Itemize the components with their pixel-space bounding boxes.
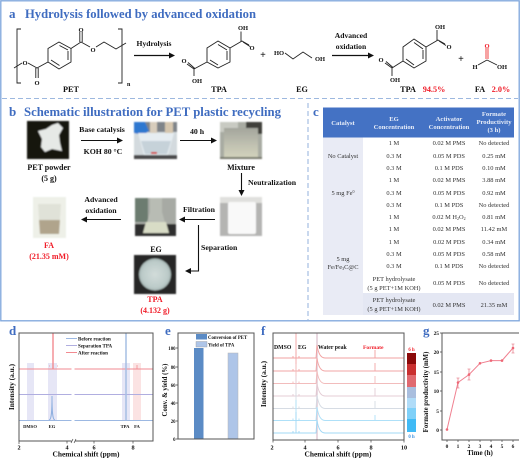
arrow: neutralization	[238, 173, 297, 196]
structure: EG: HO	[274, 50, 284, 57]
table body: 11.42 mM	[481, 226, 508, 233]
water peak band	[316, 333, 318, 440]
arrow: hydrolysis: Hydrolysis	[137, 39, 171, 48]
axis labels: 6	[336, 444, 340, 452]
panel a: hydrolysis and oxidation scheme	[9, 6, 510, 94]
arrow: 40 h: 40 h	[190, 127, 205, 136]
structure: PET: n	[127, 82, 131, 88]
legend	[196, 334, 248, 348]
table body: 0.3 M	[386, 165, 402, 172]
text: TPA label	[140, 295, 170, 315]
axis labels: 6	[92, 444, 96, 452]
arrow: hydrolysis	[134, 39, 175, 58]
arrow: filtration: Filtration	[183, 205, 216, 214]
table header: Productivity	[476, 119, 512, 126]
structure: FA: 2.0%	[492, 85, 510, 94]
table header: Formate	[482, 111, 506, 118]
table header	[323, 108, 514, 138]
panel f: time-resolved NMR	[259, 323, 416, 458]
heading a: a	[9, 6, 16, 21]
axis labels: 4	[65, 444, 69, 452]
structure: PET	[14, 27, 131, 94]
legend: Yield of TPA	[208, 344, 235, 348]
text: TPA label: (4.132 g)	[140, 306, 170, 315]
structure: PET: O	[22, 60, 28, 67]
axis labels: 100	[168, 347, 176, 352]
text: FA label	[29, 241, 69, 261]
peak labels: TPA	[121, 424, 130, 429]
table body: 0.3 M	[386, 251, 402, 258]
axes	[19, 333, 153, 441]
axis labels: Intensity (a.u.)	[7, 363, 16, 410]
axis labels: 5	[501, 444, 504, 450]
table body: 1 M	[389, 214, 400, 221]
axis labels: 3	[479, 444, 482, 450]
axis break	[19, 438, 133, 444]
axis labels: 8	[131, 444, 135, 452]
arrow: advanced oxidation	[81, 195, 121, 222]
structure: FA	[472, 43, 510, 94]
axis labels: Intensity (a.u.)	[259, 360, 268, 407]
text: PET powder label	[27, 163, 71, 183]
axis labels	[162, 347, 176, 443]
panel e: bar chart	[162, 323, 254, 443]
table body: 1 M	[389, 140, 400, 147]
axis labels: 80	[171, 366, 176, 371]
text: PET powder label: PET powder	[27, 163, 71, 172]
table body: No detected	[479, 280, 510, 287]
axis labels: Conv. & yield (%)	[162, 364, 169, 416]
arrow: base catalysis: Base catalysis	[79, 125, 125, 134]
table body: 3	[342, 266, 344, 271]
axis labels: 10	[434, 389, 439, 395]
table body: 5 mg Fe	[332, 190, 352, 197]
photo: FA beaker	[33, 197, 66, 238]
structure: PET: O	[90, 47, 96, 54]
structure: EG: OH	[315, 56, 325, 63]
structure: FA: FA	[475, 85, 485, 94]
axis labels: 2	[468, 444, 471, 450]
table body: 0.02 M PMS	[433, 140, 466, 147]
axes	[176, 333, 254, 439]
table body: 0.1 M PDS	[435, 165, 464, 172]
photo: EG flask	[135, 198, 176, 236]
photo: white precipitate	[220, 197, 262, 236]
table body: 1 M	[389, 239, 400, 246]
table body: PET hydrolysate	[373, 297, 415, 304]
axis labels: 20	[434, 350, 439, 356]
table body: 0.34 mM	[482, 239, 506, 246]
table body: 0.3 M	[386, 263, 402, 270]
structure: FA: OH	[497, 64, 507, 71]
structure: TPA product	[378, 24, 452, 94]
table body: 0.05 M PDS	[433, 190, 465, 197]
label d: d	[9, 323, 17, 338]
arrow: advanced oxidation: Advanced	[84, 195, 118, 204]
structure: PET: O	[34, 80, 40, 87]
peak labels: FA	[134, 424, 141, 429]
table body: 0.05 M PDS	[433, 251, 465, 258]
table body: 3.88 mM	[482, 177, 506, 184]
axis labels: 2	[17, 444, 21, 452]
table body: 0.1 M PDS	[435, 263, 464, 270]
text: mixture label: Mixture	[227, 163, 255, 172]
text: FA label: (21.35 mM)	[29, 252, 69, 261]
axis labels: 10	[401, 444, 407, 452]
arrow: advanced oxidation: Advanced	[335, 31, 368, 40]
axis labels: 4	[303, 444, 307, 452]
structure: TPA product: TPA	[400, 85, 416, 94]
table body: 1 M	[389, 177, 400, 184]
table body: 1 M	[389, 226, 400, 233]
photo: mixture	[220, 122, 262, 159]
structure: TPA	[181, 25, 255, 94]
axis labels: Formate productivity (mM)	[423, 352, 430, 432]
axis labels: 60	[171, 384, 176, 389]
axis labels	[7, 363, 135, 458]
panel b: PET recycling schematic	[9, 104, 297, 315]
highlighted bands	[27, 363, 141, 420]
table body: 0.3 M	[386, 202, 402, 209]
heading b: Schematic illustration for PET plastic recycling	[24, 105, 282, 119]
data series	[446, 344, 514, 431]
peak labels: DMSO	[23, 424, 37, 429]
photo: PET powder	[27, 121, 69, 159]
table body: O	[459, 214, 464, 221]
colour scale: 6 h	[408, 348, 415, 353]
axis labels: 8	[369, 444, 373, 452]
table body: 21.35 mM	[481, 302, 508, 309]
legend: Conversion of PET	[208, 336, 248, 341]
axis labels: 0	[446, 444, 449, 450]
table body: 0.02 M H	[432, 214, 457, 221]
table body: 0.02 M PMS	[433, 226, 466, 233]
table body: 0.02 M PMS	[433, 177, 466, 184]
label e: e	[165, 323, 171, 338]
table header: (3 h)	[487, 127, 501, 134]
table body: PET hydrolysate	[373, 276, 415, 283]
text: EG label: EG	[150, 245, 162, 254]
colour scale	[407, 348, 416, 440]
label f: f	[261, 323, 266, 338]
table body: 0.3 M	[386, 153, 402, 160]
colour scale: 0 h	[408, 435, 415, 440]
axis labels: 20	[171, 420, 176, 425]
legend	[66, 338, 113, 356]
arrow: advanced oxidation	[332, 31, 374, 58]
axis labels: 4	[490, 444, 493, 450]
table body: (5 g PET+1M KOH)	[367, 306, 421, 313]
table body: 0.58 mM	[482, 251, 506, 258]
structure: FA: H	[472, 64, 478, 71]
table body: 5 mg	[337, 256, 350, 263]
legend: After reaction	[78, 352, 108, 356]
text: PET powder label: (5 g)	[41, 174, 57, 183]
spectra	[273, 333, 404, 433]
structure: EG	[274, 50, 325, 94]
peak labels: EG	[49, 424, 56, 429]
table header: Concentration	[429, 124, 470, 131]
axis labels: 6	[512, 444, 515, 450]
peak labels	[23, 424, 141, 429]
panel d: NMR spectra	[7, 323, 153, 458]
heading a: Hydrolysis followed by advanced oxidation	[25, 7, 256, 21]
table body: No Catalyst	[328, 153, 358, 160]
arrow: separation	[185, 225, 238, 274]
table body: 2	[464, 216, 466, 221]
axis labels: 2	[270, 444, 274, 452]
table body: 0.81 mM	[482, 214, 506, 221]
table body: 0.25 mM	[482, 153, 506, 160]
arrow: base catalysis: KOH 80 °C	[84, 147, 123, 156]
structure: TPA: TPA	[211, 85, 227, 94]
table body: 0	[352, 189, 354, 194]
structure: TPA: OH	[238, 25, 248, 32]
arrow: advanced oxidation: oxidation	[85, 206, 117, 215]
table body: No detected	[479, 263, 510, 270]
structure: TPA: OH	[192, 78, 202, 85]
axis labels: 25	[434, 331, 439, 337]
panel c: catalyst table	[313, 104, 514, 315]
text: FA label: FA	[44, 241, 54, 250]
table body: 0.05 M PDS	[433, 153, 465, 160]
panel g: formate line chart	[423, 323, 519, 457]
table body: 0.92 mM	[482, 190, 506, 197]
heading c: c	[313, 104, 319, 119]
structure: TPA product: O	[446, 44, 452, 51]
arrow: filtration	[179, 205, 216, 222]
table body: Fe/Fe	[328, 264, 342, 271]
structure: PET: PET	[63, 85, 79, 94]
structure: TPA product: O	[378, 57, 384, 64]
axis labels: 0	[173, 438, 176, 443]
axis labels: 15	[434, 370, 439, 376]
table body: 0.1 M PDS	[435, 202, 464, 209]
peak labels	[274, 345, 384, 351]
table header: Catalyst	[331, 120, 356, 127]
photo: TPA pellet	[134, 255, 176, 294]
peak labels: Water peak	[318, 345, 347, 351]
arrow: neutralization: Neutralization	[248, 178, 297, 187]
axis labels: 0	[436, 428, 439, 434]
arrow: separation: Separation	[201, 243, 238, 252]
table body: 0.02 M PMS	[433, 302, 466, 309]
axis labels: 1	[457, 444, 460, 450]
table header: EG	[389, 116, 399, 123]
axes	[440, 333, 519, 442]
structure: TPA product: 94.5%	[423, 85, 445, 94]
axis labels: 40	[171, 402, 176, 407]
structure: EG: EG	[296, 85, 309, 94]
table body: 0.02 M PDS	[433, 239, 465, 246]
label g: g	[423, 323, 430, 338]
legend: Separation TPA	[78, 344, 113, 350]
axis labels: Time (h)	[467, 449, 494, 457]
table body: No detected	[479, 140, 510, 147]
arrow: advanced oxidation: oxidation	[336, 42, 367, 51]
table body: 2	[457, 216, 459, 221]
spectra lines	[19, 333, 153, 420]
table body: 0.10 mM	[482, 165, 506, 172]
structure: FA: O	[484, 43, 490, 50]
axis labels: 5	[436, 409, 439, 415]
table body: C@C	[344, 264, 358, 271]
axis labels	[423, 331, 515, 457]
structure: TPA: O	[249, 45, 255, 52]
plus sign: +	[260, 50, 266, 61]
outer frame	[1, 1, 519, 321]
bars	[194, 348, 238, 439]
table body: (5 g PET+1M KOH)	[367, 285, 421, 292]
arrow: base catalysis	[79, 125, 125, 156]
table body	[323, 138, 514, 315]
table body: No detected	[479, 202, 510, 209]
axis labels	[259, 360, 407, 458]
peak labels: DMSO	[274, 345, 292, 351]
peak labels: EG	[298, 345, 307, 351]
structure: PET: O	[78, 27, 84, 34]
table header: Concentration	[374, 124, 415, 131]
axes	[273, 333, 404, 442]
table body: 0.05 M PDS	[433, 280, 465, 287]
structure: TPA: O	[181, 58, 187, 65]
text: TPA label: TPA	[147, 295, 163, 304]
table body: 0.3 M	[386, 190, 402, 197]
arrow: 40 h	[180, 127, 217, 144]
legend: Before reaction	[78, 338, 111, 342]
peak labels: Formate	[363, 345, 384, 351]
structure: TPA product: OH	[390, 77, 400, 84]
table header: Activator	[436, 116, 462, 123]
heading b: b	[9, 104, 16, 119]
structure: TPA product: OH	[435, 24, 445, 31]
plus sign: +	[458, 54, 464, 65]
photo: reaction beaker	[134, 122, 177, 159]
